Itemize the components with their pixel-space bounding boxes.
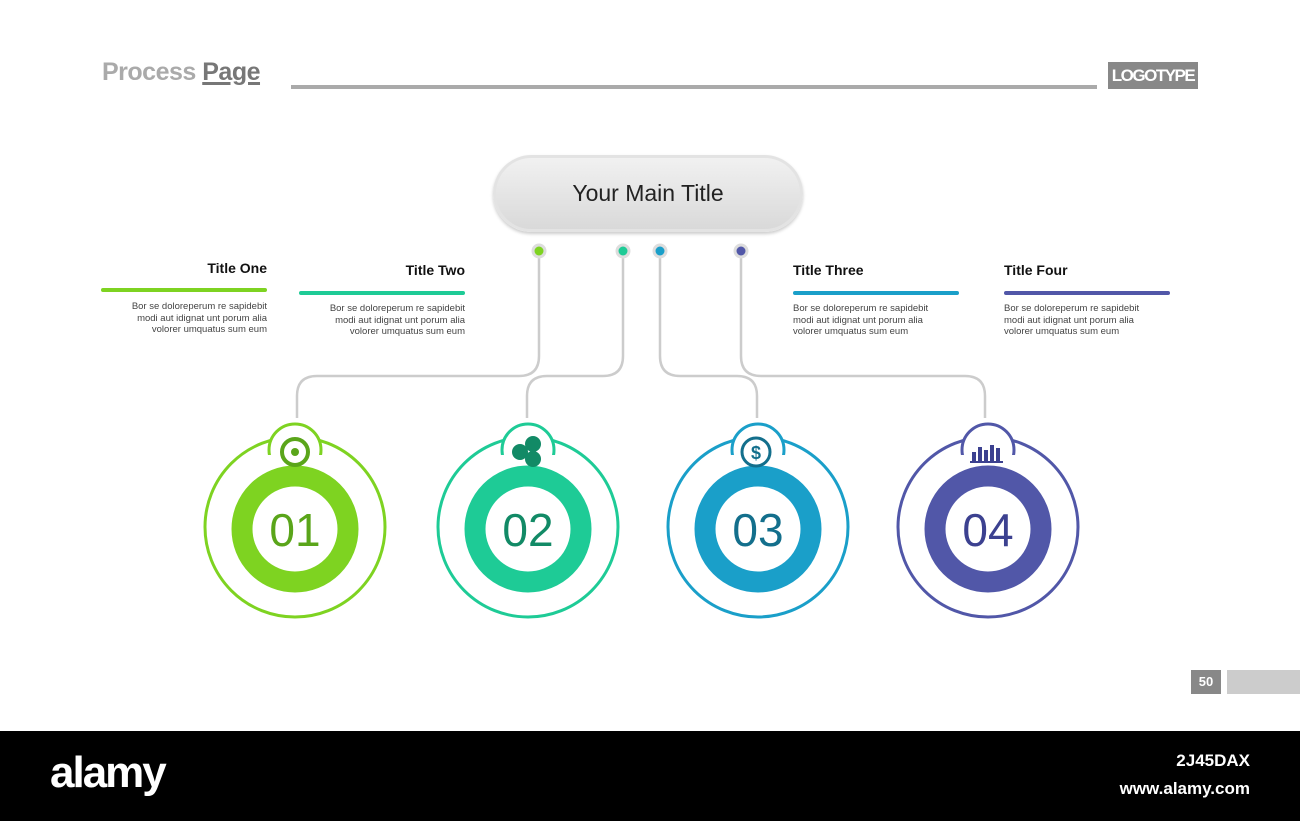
page number: 50 [1199, 674, 1213, 689]
text block: title three: Title Three [793, 262, 864, 278]
step 01: 01 [269, 504, 321, 556]
text block: title one: Bor se doloreperum re sapidebit modi aut idignat unt porum alia volorer umquatus sum eum [132, 301, 267, 335]
text block: title three [793, 262, 959, 337]
text block: title four [1004, 262, 1170, 337]
text block: title one: Title One [207, 260, 267, 276]
text block: title two [299, 262, 466, 337]
header rule [291, 85, 1097, 89]
step 03: 03 [732, 504, 784, 556]
text block: title one [101, 260, 268, 335]
footer bar: alamy [50, 748, 165, 797]
step 04: 04 [962, 504, 1014, 556]
step 02: 02 [502, 504, 554, 556]
text block: title two: Bor se doloreperum re sapidebit modi aut idignat unt porum alia volorer umquatus sum eum [330, 303, 465, 337]
logotype: LOGOTYPE [1112, 66, 1194, 85]
footer bar [0, 731, 1300, 821]
step 03: $ [751, 443, 761, 463]
main title pill [493, 155, 803, 232]
text block: title two: Title Two [406, 262, 465, 278]
main title pill: Your Main Title [572, 180, 724, 206]
footer bar: 2J45DAX [1176, 751, 1250, 770]
footer bar: www.alamy.com [1120, 779, 1250, 798]
page number [1191, 670, 1221, 694]
text block: title four: Title Four [1004, 262, 1068, 278]
connectors [297, 258, 985, 418]
step 01 [205, 424, 385, 617]
step 04 [898, 424, 1078, 617]
header title: Process Page [102, 58, 260, 86]
text block: title four: Bor se doloreperum re sapidebit modi aut idignat unt porum alia volorer umquatus sum eum [1004, 303, 1139, 337]
text block: title three: Bor se doloreperum re sapidebit modi aut idignat unt porum alia volorer umquatus sum eum [793, 303, 928, 337]
step 02 [438, 424, 618, 617]
connector dots [533, 245, 747, 257]
logotype [1108, 62, 1198, 89]
step 03 [668, 424, 848, 617]
page bar [1227, 670, 1300, 694]
